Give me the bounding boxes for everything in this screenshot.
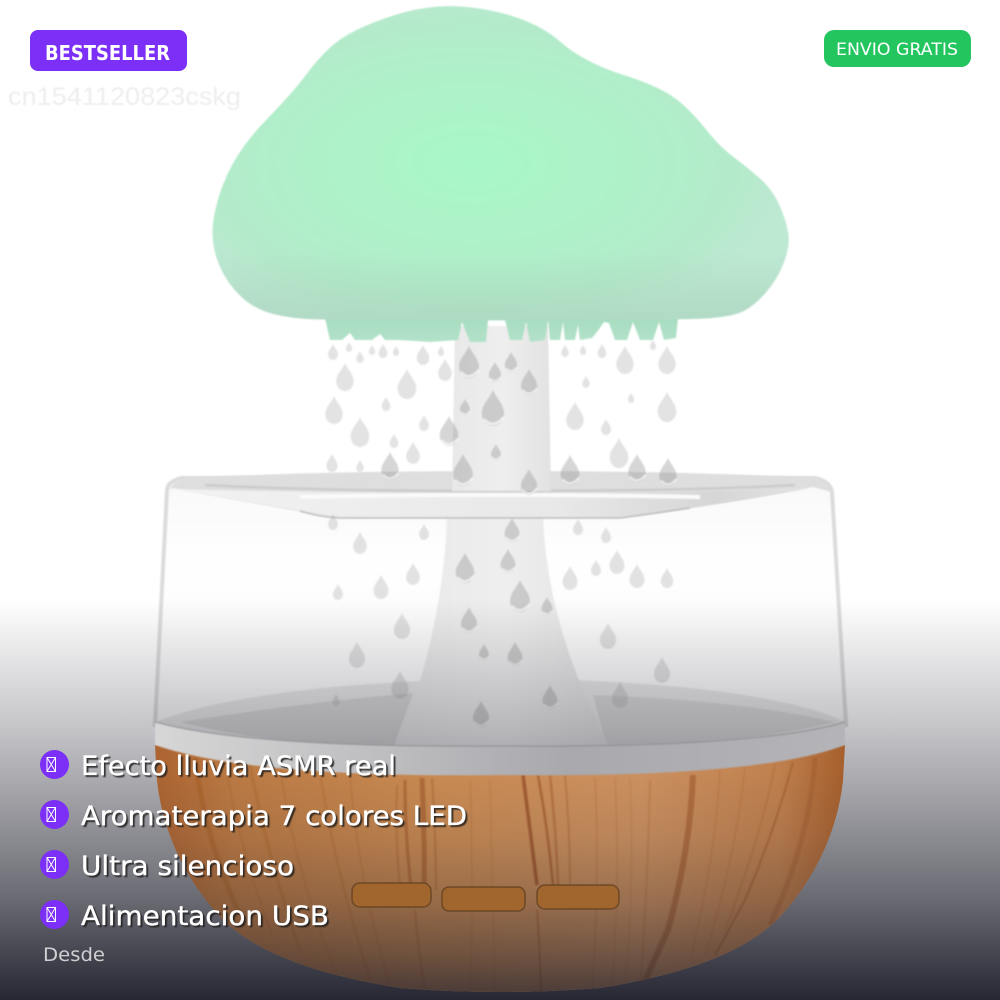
feature: usb power: Alimentacion USB [81,901,329,932]
wood base [150,740,850,995]
lid band [170,471,832,518]
highlighted drops [381,346,677,727]
diffuser glass tank [155,478,846,752]
watermark code: cn1541120823cskg [8,83,241,111]
cloud [212,6,789,320]
badge: envio gratis: ENVIO GRATIS [836,40,958,59]
upper stem [452,326,551,491]
badge: bestseller [30,30,187,71]
feature: rain effect: Efecto lluvia ASMR real [81,751,396,782]
wood grain [195,758,815,992]
feature list [40,750,469,934]
rain drops [325,340,677,727]
feature: usb power: Alimentacion USB [83,903,331,934]
dark gradient overlay [0,600,1000,1000]
feature: silent: Ultra silencioso [83,853,296,884]
feature: rain effect: Efecto lluvia ASMR real [83,753,398,784]
badge: bestseller: BESTSELLER [45,41,170,65]
lower stem [397,515,610,748]
white base ring [155,722,845,775]
plain drops [325,340,676,708]
feature: aromatherapy: Aromaterapia 7 colores LED [81,801,467,832]
badge: envio gratis [824,30,971,67]
lid light bar [176,488,810,518]
price label: desde: Desde [43,944,105,966]
feature: aromatherapy: Aromaterapia 7 colores LED [83,803,469,834]
control buttons [352,883,619,911]
cloud teeth [325,318,678,342]
feature: silent: Ultra silencioso [81,851,294,882]
product upper: tank, stem, cloud, rain [155,6,846,752]
